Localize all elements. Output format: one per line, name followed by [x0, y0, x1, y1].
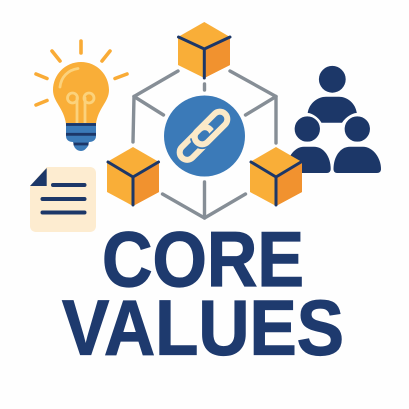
icon: left cube — [107, 147, 159, 206]
bulb base — [66, 123, 96, 151]
diagram: hexagon connector lines — [133, 71, 276, 218]
icon: document — [30, 167, 96, 232]
title line: values: VALUES — [62, 284, 344, 372]
icon: top cube — [178, 22, 230, 78]
icon: central chain link — [164, 96, 245, 176]
icon: people group — [286, 66, 381, 173]
title line: core: CORE — [102, 215, 304, 303]
bulb rays — [36, 41, 127, 105]
bulb highlight and filament — [60, 68, 94, 123]
title — [62, 215, 344, 372]
icon: right cube — [250, 147, 302, 206]
icon: light bulb — [36, 41, 127, 151]
bulb glass — [53, 62, 109, 124]
